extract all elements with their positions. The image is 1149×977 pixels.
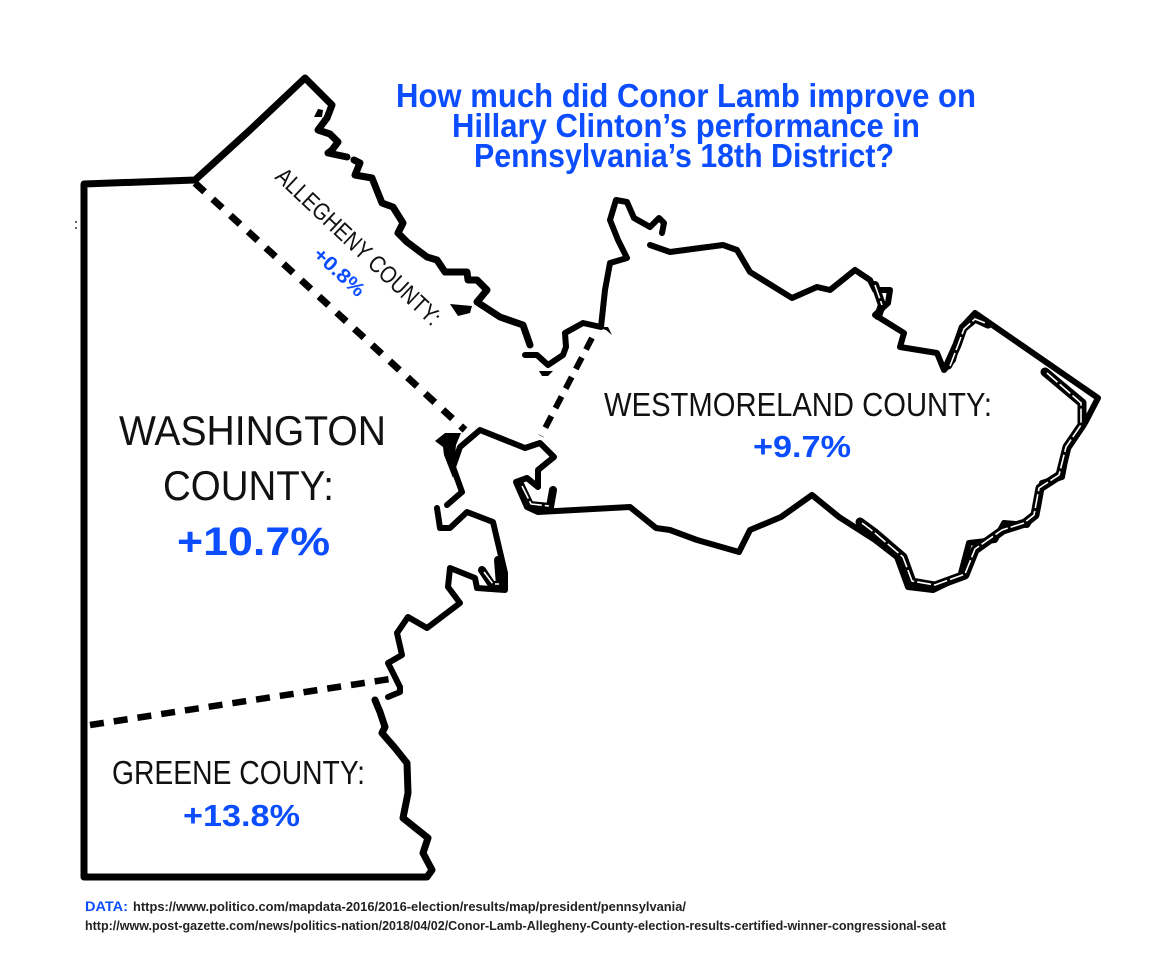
stray dots xyxy=(75,221,77,229)
label: Washington County: WASHINGTON xyxy=(119,407,386,454)
title: How much did Conor Lamb improve on xyxy=(396,77,976,114)
western border of Washington, Greene and Allegheny counties xyxy=(84,78,530,877)
Westmoreland county outline xyxy=(447,245,1098,590)
county divider: Allegheny and Washington xyxy=(195,183,465,430)
label: Washington County: COUNTY: xyxy=(163,462,334,509)
value: Allegheny +0.8%: +0.8% xyxy=(309,243,369,302)
label: Westmoreland County: WESTMORELAND COUNTY: xyxy=(604,386,992,423)
county divider: Allegheny and Westmoreland xyxy=(541,338,592,436)
title: Hillary Clinton’s performance in xyxy=(452,107,920,144)
title: Pennsylvania’s 18th District? xyxy=(474,137,894,174)
value: Washington +10.7%: +10.7% xyxy=(177,520,330,564)
map: district outline xyxy=(75,78,1098,877)
small outline fragments xyxy=(314,109,612,376)
northern river edge xyxy=(525,200,664,365)
river blob near confluence xyxy=(435,433,461,478)
data sources xyxy=(85,898,947,933)
thick double river lines xyxy=(482,285,1082,586)
data sources: DATA: xyxy=(85,898,128,914)
label: Greene County: GREENE COUNTY: xyxy=(112,754,365,791)
title xyxy=(396,77,976,174)
Washington county eastern river edge xyxy=(388,508,505,697)
label: Washington County xyxy=(119,407,386,509)
county divider: Washington and Greene xyxy=(90,679,390,725)
data sources: http://www.post-gazette.com/news/politics-nation/2018/04/02/Conor-Lamb-Allegheny-County-election-results-certified-winner-congressional-seat xyxy=(85,919,947,933)
data sources: https://www.politico.com/mapdata-2016/2016-election/results/map/president/pennsylvania/ xyxy=(133,900,687,914)
value: Westmoreland +9.7%: +9.7% xyxy=(753,429,851,464)
label: Allegheny County: ALLEGHENY COUNTY: xyxy=(270,163,446,331)
value: Greene +13.8%: +13.8% xyxy=(183,798,300,833)
